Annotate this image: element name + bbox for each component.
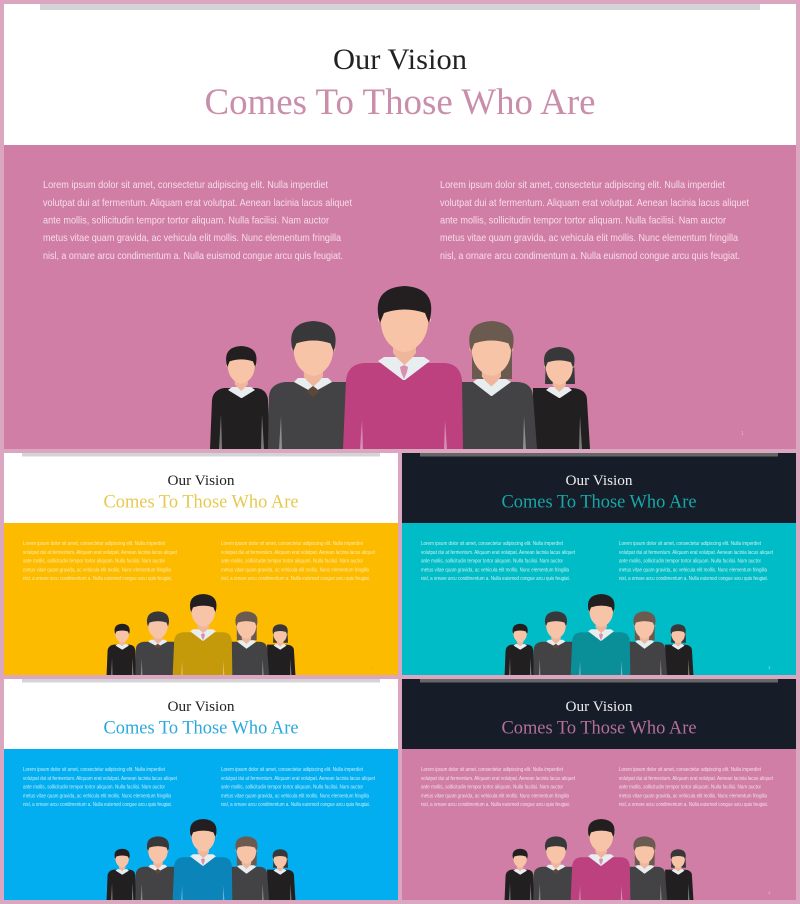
text block: columns: nisl, a ornare arcu condimentum a. Nulla euismod congue arcu quis feugiat. bbox=[619, 576, 768, 582]
text block: left column: Lorem ipsum dolor sit amet, consectetur adipiscing elit. Nulla imperdiet bbox=[43, 179, 328, 191]
text block: columns: Lorem ipsum dolor sit amet, consectetur adipiscing elit. Nulla imperdiet bbox=[421, 541, 563, 547]
text block: columns: ante mollis, sollicitudin tempor tortor aliquam. Nulla facilisi. Nam auctor bbox=[619, 559, 761, 565]
slide number: 1 bbox=[370, 665, 373, 670]
top bar bbox=[22, 453, 380, 456]
text block: columns: Lorem ipsum dolor sit amet, consectetur adipiscing elit. Nulla imperdiet bbox=[23, 767, 165, 773]
text block: columns: ante mollis, sollicitudin tempor tortor aliquam. Nulla facilisi. Nam auctor bbox=[421, 785, 563, 791]
panel: blue slide bbox=[4, 679, 398, 900]
text block: columns: volutpat dui at fermentum. Aliquam erat volutpat. Aenean lacinia lacus aliquet bbox=[221, 550, 375, 556]
text block: columns: Lorem ipsum dolor sit amet, consectetur adipiscing elit. Nulla imperdiet bbox=[619, 767, 761, 773]
panel: teal slide bbox=[402, 453, 796, 675]
text block: left column: ante mollis, sollicitudin tempor tortor aliquam. Nulla facilisi. Nam auctor bbox=[43, 214, 329, 226]
icon: group of five people bbox=[107, 819, 295, 900]
panel: yellow slide bbox=[4, 453, 398, 675]
icon: group of five people bbox=[107, 594, 295, 675]
subtitle: Comes To Those Who Are bbox=[204, 82, 596, 123]
text block: columns bbox=[421, 767, 773, 808]
colour panel bbox=[4, 749, 398, 900]
title: Our Vision: Our Vision bbox=[168, 473, 235, 489]
top bar bbox=[40, 4, 760, 10]
text block: columns: metus vitae quam gravida, ac vehicula elit mollis. Nunc elementum fringilla bbox=[23, 793, 171, 799]
panel: main slide pink bbox=[4, 4, 796, 449]
header band bbox=[4, 679, 398, 749]
text block: columns: ante mollis, sollicitudin tempor tortor aliquam. Nulla facilisi. Nam auctor bbox=[23, 785, 165, 791]
header band bbox=[402, 679, 796, 749]
subtitle: Comes To Those Who Are bbox=[502, 492, 696, 512]
header band bbox=[4, 453, 398, 523]
text block: left column: metus vitae quam gravida, ac vehicula elit mollis. Nunc elementum fringilla bbox=[43, 232, 341, 244]
title: Our Vision: Our Vision bbox=[168, 699, 235, 715]
text block: columns: nisl, a ornare arcu condimentum a. Nulla euismod congue arcu quis feugiat. bbox=[23, 576, 172, 582]
text block: columns: volutpat dui at fermentum. Aliquam erat volutpat. Aenean lacinia lacus aliquet bbox=[619, 550, 773, 556]
text block: columns bbox=[23, 541, 375, 582]
subtitle: Comes To Those Who Are bbox=[502, 718, 696, 738]
text block: columns: ante mollis, sollicitudin tempor tortor aliquam. Nulla facilisi. Nam auctor bbox=[221, 559, 363, 565]
text block: columns: ante mollis, sollicitudin tempor tortor aliquam. Nulla facilisi. Nam auctor bbox=[421, 559, 563, 565]
icon: group of five people bbox=[505, 819, 693, 900]
text block: columns: metus vitae quam gravida, ac vehicula elit mollis. Nunc elementum fringilla bbox=[619, 793, 767, 799]
text block: left column bbox=[43, 179, 352, 262]
text block: columns: ante mollis, sollicitudin tempor tortor aliquam. Nulla facilisi. Nam auctor bbox=[221, 785, 363, 791]
top bar bbox=[420, 453, 778, 456]
text block: columns: Lorem ipsum dolor sit amet, consectetur adipiscing elit. Nulla imperdiet bbox=[221, 541, 363, 547]
text block: columns bbox=[421, 541, 773, 582]
text block: columns: ante mollis, sollicitudin tempor tortor aliquam. Nulla facilisi. Nam auctor bbox=[619, 785, 761, 791]
top bar bbox=[22, 679, 380, 682]
text block: columns: volutpat dui at fermentum. Aliquam erat volutpat. Aenean lacinia lacus aliquet bbox=[221, 776, 375, 782]
text block: columns: metus vitae quam gravida, ac vehicula elit mollis. Nunc elementum fringilla bbox=[23, 567, 171, 573]
text block: columns: nisl, a ornare arcu condimentum a. Nulla euismod congue arcu quis feugiat. bbox=[421, 802, 570, 808]
text block: columns: Lorem ipsum dolor sit amet, consectetur adipiscing elit. Nulla imperdiet bbox=[23, 541, 165, 547]
text block: right column: ante mollis, sollicitudin tempor tortor aliquam. Nulla facilisi. Nam auctor bbox=[440, 214, 726, 226]
text block: columns: volutpat dui at fermentum. Aliquam erat volutpat. Aenean lacinia lacus aliquet bbox=[421, 776, 575, 782]
text block: columns bbox=[23, 767, 375, 808]
colour panel bbox=[402, 749, 796, 900]
text block: columns: nisl, a ornare arcu condimentum a. Nulla euismod congue arcu quis feugiat. bbox=[221, 802, 370, 808]
text block: right column bbox=[440, 179, 749, 262]
text block: columns: volutpat dui at fermentum. Aliquam erat volutpat. Aenean lacinia lacus aliquet bbox=[421, 550, 575, 556]
icon: group of five people bbox=[505, 594, 693, 675]
text block: columns: ante mollis, sollicitudin tempor tortor aliquam. Nulla facilisi. Nam auctor bbox=[23, 559, 165, 565]
subtitle: Comes To Those Who Are bbox=[104, 718, 298, 738]
text block: columns: Lorem ipsum dolor sit amet, consectetur adipiscing elit. Nulla imperdiet bbox=[221, 767, 363, 773]
slide number: 1 bbox=[768, 665, 771, 670]
text block: columns: nisl, a ornare arcu condimentum a. Nulla euismod congue arcu quis feugiat. bbox=[619, 802, 768, 808]
icon: group of five people bbox=[210, 286, 590, 449]
top bar bbox=[420, 679, 778, 682]
text block: columns: nisl, a ornare arcu condimentum a. Nulla euismod congue arcu quis feugiat. bbox=[23, 802, 172, 808]
title: Our Vision: Our Vision bbox=[333, 43, 467, 76]
text block: right column: volutpat dui at fermentum. Aliquam erat volutpat. Aenean lacinia lacus aliquet bbox=[440, 197, 749, 209]
text block: columns: volutpat dui at fermentum. Aliquam erat volutpat. Aenean lacinia lacus aliquet bbox=[23, 550, 177, 556]
text block: columns: Lorem ipsum dolor sit amet, consectetur adipiscing elit. Nulla imperdiet bbox=[619, 541, 761, 547]
text block: columns: metus vitae quam gravida, ac vehicula elit mollis. Nunc elementum fringilla bbox=[619, 567, 767, 573]
colour panel bbox=[402, 523, 796, 675]
text block: columns: metus vitae quam gravida, ac vehicula elit mollis. Nunc elementum fringilla bbox=[421, 793, 569, 799]
title: Our Vision: Our Vision bbox=[566, 699, 633, 715]
text block: columns: metus vitae quam gravida, ac vehicula elit mollis. Nunc elementum fringilla bbox=[221, 567, 369, 573]
slide number: 1 bbox=[768, 890, 771, 895]
text block: columns: metus vitae quam gravida, ac vehicula elit mollis. Nunc elementum fringilla bbox=[221, 793, 369, 799]
text block: left column: volutpat dui at fermentum. Aliquam erat volutpat. Aenean lacinia lacus aliquet bbox=[43, 197, 352, 209]
text block: right column: nisl, a ornare arcu condimentum a. Nulla euismod congue arcu quis feugiat. bbox=[440, 250, 740, 262]
colour panel bbox=[4, 145, 796, 449]
text block: columns: volutpat dui at fermentum. Aliquam erat volutpat. Aenean lacinia lacus aliquet bbox=[23, 776, 177, 782]
text block: columns: Lorem ipsum dolor sit amet, consectetur adipiscing elit. Nulla imperdiet bbox=[421, 767, 563, 773]
text block: columns: nisl, a ornare arcu condimentum a. Nulla euismod congue arcu quis feugiat. bbox=[221, 576, 370, 582]
header band bbox=[402, 453, 796, 523]
panel: dark and pink slide bbox=[402, 679, 796, 900]
text block: columns: nisl, a ornare arcu condimentum a. Nulla euismod congue arcu quis feugiat. bbox=[421, 576, 570, 582]
text block: columns: metus vitae quam gravida, ac vehicula elit mollis. Nunc elementum fringilla bbox=[421, 567, 569, 573]
text block: right column: metus vitae quam gravida, ac vehicula elit mollis. Nunc elementum fringilla bbox=[440, 232, 738, 244]
colour panel bbox=[4, 523, 398, 675]
title: Our Vision: Our Vision bbox=[566, 473, 633, 489]
text block: columns: volutpat dui at fermentum. Aliquam erat volutpat. Aenean lacinia lacus aliquet bbox=[619, 776, 773, 782]
subtitle: Comes To Those Who Are bbox=[104, 492, 298, 512]
text block: left column: nisl, a ornare arcu condimentum a. Nulla euismod congue arcu quis feugiat. bbox=[43, 250, 343, 262]
slide number: 1 bbox=[741, 431, 744, 437]
text block: right column: Lorem ipsum dolor sit amet, consectetur adipiscing elit. Nulla imperdiet bbox=[440, 179, 725, 191]
header band bbox=[4, 4, 796, 145]
